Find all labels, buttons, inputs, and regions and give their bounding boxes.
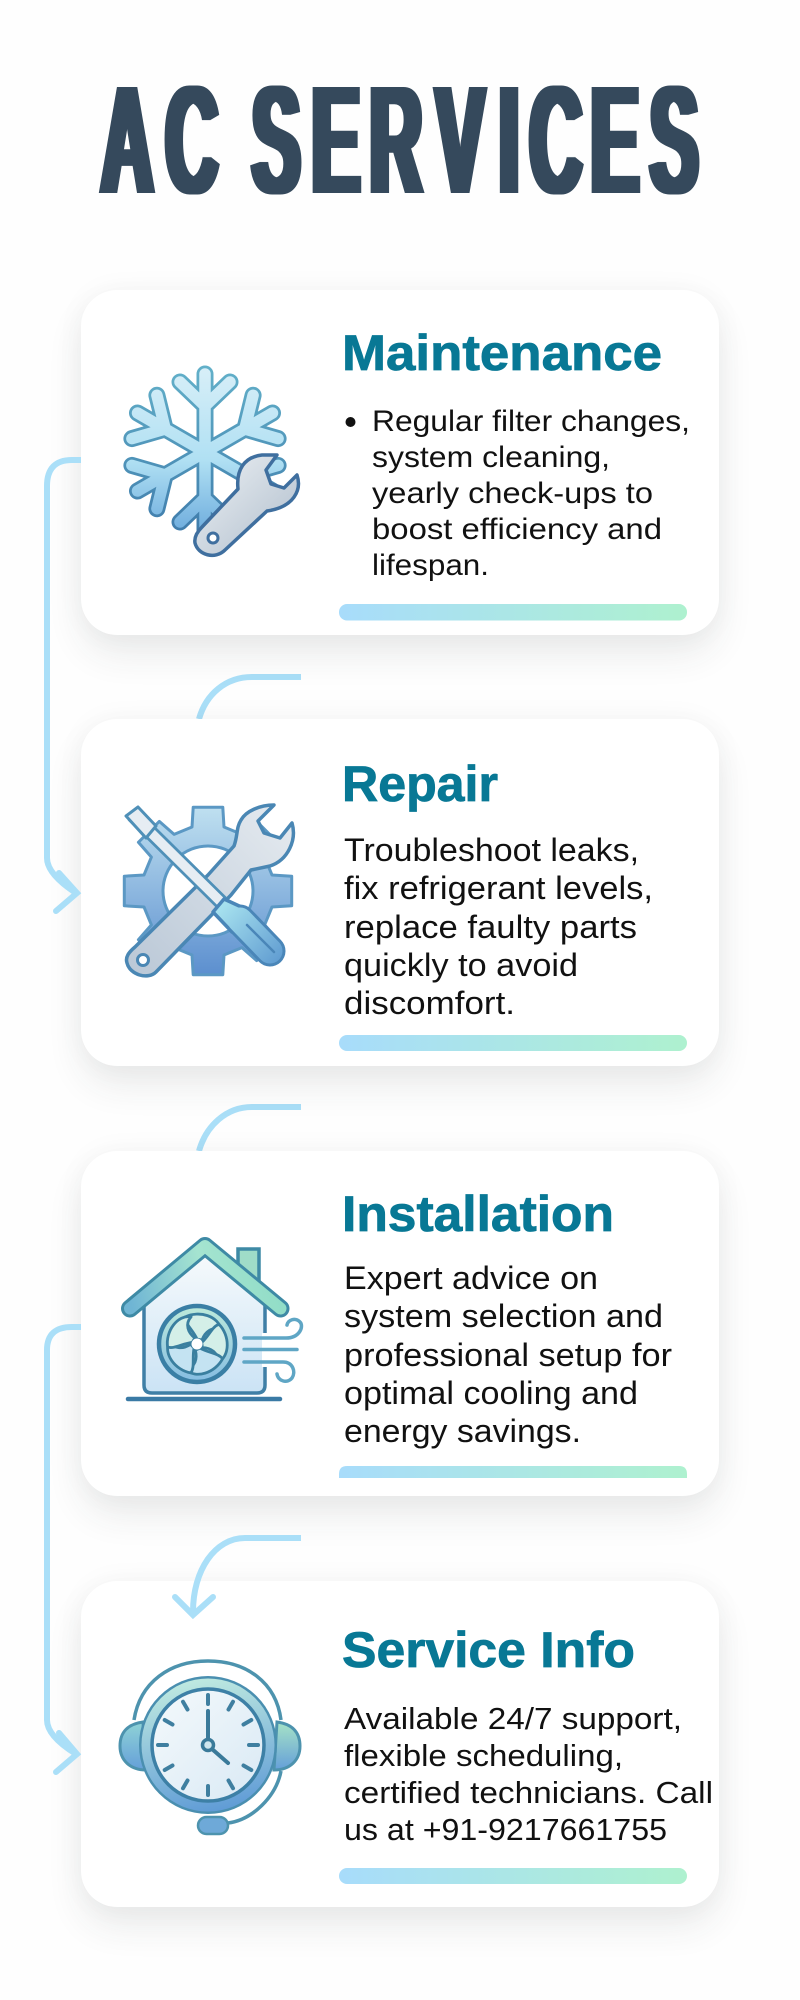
text block [344, 1260, 672, 1449]
text block: energy savings. [344, 1413, 581, 1449]
text block: Troubleshoot leaks, [344, 832, 639, 868]
panel: installation [81, 1151, 719, 1496]
heading: Service Info [342, 1622, 635, 1678]
panel: maintenance [81, 290, 719, 635]
text block: yearly check-ups to [372, 477, 653, 510]
arrow: installation to service info [44, 1324, 82, 1775]
accent bar [339, 604, 687, 620]
panel: service info [81, 1581, 719, 1907]
text block: certified technicians. Call [344, 1775, 713, 1810]
text block: system selection and [344, 1298, 663, 1334]
text block: system cleaning, [372, 441, 610, 474]
heading: Repair [342, 756, 498, 812]
connector: curved line into repair card [196, 674, 301, 719]
text block: optimal cooling and [344, 1375, 638, 1411]
text block: Regular filter changes, [372, 405, 690, 438]
text block: lifespan. [372, 549, 489, 582]
text block: quickly to avoid [344, 947, 578, 983]
text block: flexible scheduling, [344, 1738, 623, 1773]
text block: us at +91-9217661755 [344, 1812, 667, 1847]
accent bar [339, 1868, 687, 1884]
arrow: into service info card [172, 1535, 301, 1619]
heading: Maintenance [342, 325, 662, 381]
icon: clock with headset [120, 1661, 300, 1834]
text block: Available 24/7 support, [344, 1701, 682, 1736]
icon: snowflake with wrench [132, 374, 298, 555]
icon: gear with crossed tools [124, 805, 293, 976]
text block: boost efficiency and [372, 513, 662, 546]
text block [344, 832, 653, 1021]
text block: fix refrigerant levels, [344, 870, 653, 906]
text block: Expert advice on [344, 1260, 598, 1296]
accent bar [339, 1466, 687, 1478]
text block [346, 405, 690, 582]
text block: discomfort. [344, 985, 515, 1021]
accent bar [339, 1035, 687, 1051]
icon: house with fan [128, 1246, 301, 1399]
arrow: maintenance to repair [44, 457, 82, 914]
text block: replace faulty parts [344, 909, 637, 945]
text block [344, 1701, 713, 1847]
panel: repair [81, 719, 719, 1066]
connector: curved line into installation card [196, 1104, 301, 1151]
text block: professional setup for [344, 1337, 672, 1373]
heading: Installation [342, 1186, 614, 1242]
